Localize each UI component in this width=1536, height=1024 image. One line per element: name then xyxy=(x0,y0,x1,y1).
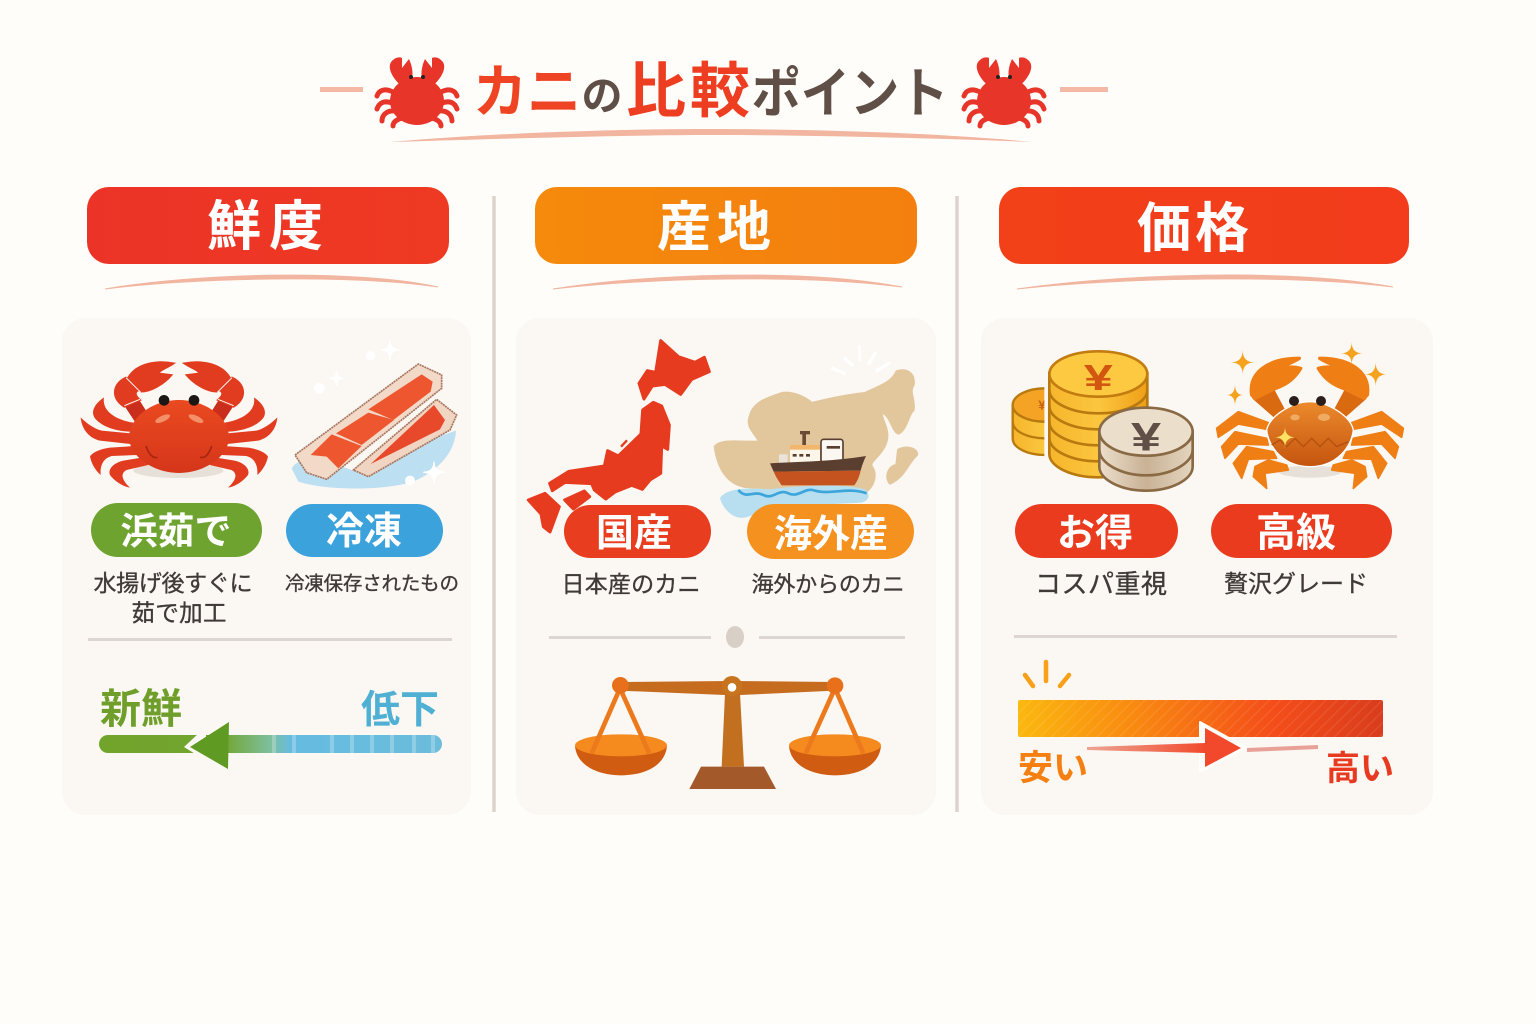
icon: yen coin stacks: ¥ xyxy=(1084,359,1113,398)
pill: 冷凍: 冷凍 xyxy=(326,511,402,553)
price rays xyxy=(1025,662,1069,686)
icon: balance scale xyxy=(575,676,881,789)
pill: お得 xyxy=(1015,504,1178,558)
panel: 価格 xyxy=(981,318,1433,815)
heading: 価格: 価格 xyxy=(1137,199,1249,259)
infographic canvas xyxy=(80,57,1409,812)
icon: fresh red crab xyxy=(81,362,277,488)
icon: yen coin stacks: ¥ xyxy=(1131,416,1162,460)
pill: 海外産 xyxy=(747,504,914,559)
title text: の: の xyxy=(582,73,622,119)
column: 価格 xyxy=(999,187,1409,784)
label: 高い: 高い xyxy=(1326,750,1394,788)
pill: 国産: 国産 xyxy=(596,513,672,555)
icon: japan map xyxy=(528,341,709,532)
pill: 冷凍 xyxy=(286,504,443,557)
heading: 産地: 産地 xyxy=(657,198,771,258)
title text: 比較: 比較 xyxy=(626,58,750,125)
column: 産地 xyxy=(516,187,936,815)
title text: カニ: カニ xyxy=(473,60,581,125)
pill: 浜茹で xyxy=(91,503,262,557)
label: 安い: 安い xyxy=(1018,749,1088,788)
label: 新鮮: 新鮮 xyxy=(100,686,182,732)
text: 浜茹で description: 茹で加工 xyxy=(132,600,226,626)
heading: 産地 xyxy=(535,187,917,264)
icon: title crab right xyxy=(964,57,1044,126)
label: 低下: 低下 xyxy=(361,689,439,732)
pill: 海外産: 海外産 xyxy=(774,514,888,556)
icon: overseas map with ship xyxy=(715,347,917,518)
panel: 鮮度 xyxy=(62,318,471,815)
heading: 鮮度 xyxy=(87,187,449,264)
text: 国産 description: 日本産のカニ xyxy=(562,571,700,597)
heading: 価格 xyxy=(999,187,1409,264)
panel: 産地 xyxy=(516,318,936,815)
text: 浜茹で description xyxy=(94,570,252,626)
icon: premium orange crab xyxy=(1217,342,1403,488)
icon: yen coin stacks: ¥ xyxy=(1038,397,1046,412)
pill: お得: お得 xyxy=(1057,513,1133,555)
pill: 浜茹で: 浜茹で xyxy=(120,511,232,552)
icon: yen coin stacks xyxy=(1013,351,1193,491)
text: 浜茹で description: 水揚げ後すぐに xyxy=(94,570,252,596)
text: お得 description: コスパ重視 xyxy=(1035,569,1167,599)
icon: title crab left xyxy=(377,57,457,126)
heading: 鮮度: 鮮度 xyxy=(207,197,323,257)
title block xyxy=(320,57,1108,142)
text: 海外産 description: 海外からのカニ xyxy=(752,572,904,597)
icon: frozen crab meat xyxy=(292,340,457,489)
price arrow xyxy=(1087,722,1318,772)
pill: 国産 xyxy=(564,505,711,558)
price gradient bar xyxy=(1018,700,1383,737)
title text: ポイント: ポイント xyxy=(752,64,948,124)
text: 高級 description: 贅沢グレード xyxy=(1224,571,1368,598)
pill: 高級: 高級 xyxy=(1256,511,1336,555)
freshness arrow bar xyxy=(99,722,442,769)
column: 鮮度 xyxy=(62,187,471,815)
pill: 高級 xyxy=(1211,504,1392,558)
text: 冷凍 description: 冷凍保存されたもの xyxy=(285,573,459,595)
